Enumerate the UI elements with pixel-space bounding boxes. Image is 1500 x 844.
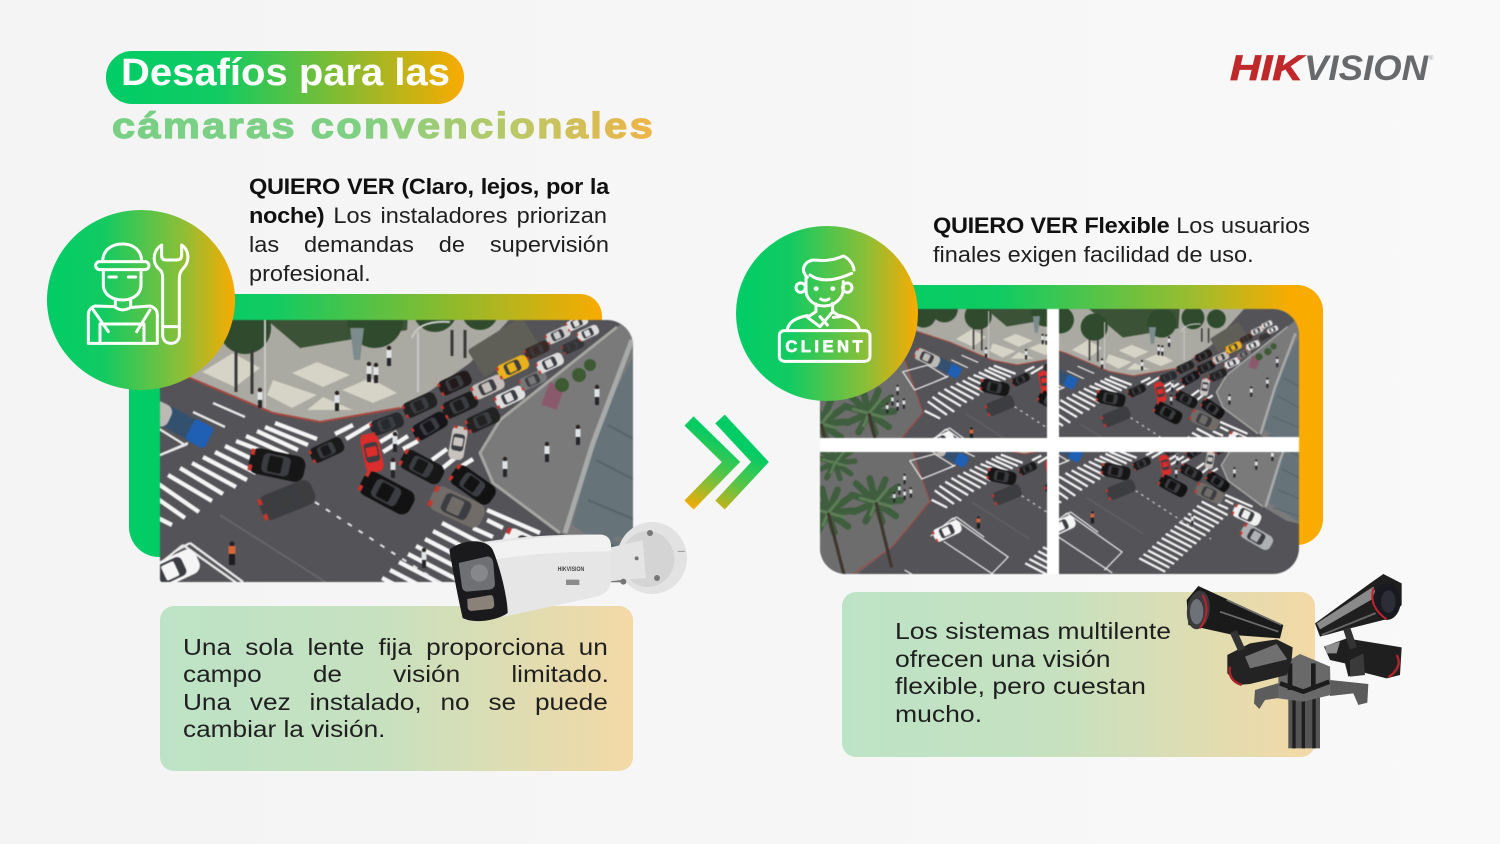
- photo: single wide-angle intersection: [159, 319, 634, 583]
- callout text: Una sola lente fija proporciona un: [183, 634, 608, 660]
- logo: Hikvision: [1230, 50, 1434, 86]
- icon: multi-camera pole: [1186, 574, 1402, 748]
- text block: quiero ver claro: las demandas de supervisión: [249, 232, 609, 257]
- callout text: Los sistemas multilente: [895, 618, 1171, 644]
- view: top left: [819, 308, 1048, 439]
- title: [106, 51, 655, 145]
- arrow: double chevron: [684, 414, 769, 510]
- text block: quiero ver claro: [249, 174, 610, 286]
- callout text: [895, 618, 1171, 726]
- logo: Hikvision: ®: [1429, 55, 1434, 62]
- text block: quiero ver claro: profesional.: [249, 261, 371, 286]
- text block: quiero ver claro: noche) Los instaladores priorizan: [249, 203, 607, 228]
- icon: installer badge: [47, 210, 235, 390]
- text block: quiero ver flexible: [933, 213, 1310, 267]
- panel: left gradient frame: [129, 294, 602, 557]
- view: top right: [1058, 308, 1300, 438]
- callout text: [183, 634, 609, 742]
- view: bottom left: [819, 451, 1048, 575]
- icon: client badge: [736, 226, 918, 401]
- panel: right gradient frame: [860, 285, 1323, 545]
- text block: quiero ver flexible: QUIERO VER Flexible Los usuarios: [933, 213, 1310, 238]
- icon: bullet camera: HIKVISION: [558, 566, 584, 573]
- view: bottom right: [1058, 451, 1300, 575]
- text block: quiero ver claro: QUIERO VER (Claro, lejos, por la: [249, 174, 609, 199]
- callout text: ofrecen una visión: [895, 646, 1111, 672]
- callout: left limitation: [160, 606, 633, 771]
- photo grid: four cropped views: [820, 309, 1299, 574]
- icon: client badge: CLIENT: [785, 337, 863, 356]
- title pill: Desafíos para las: Desafíos para las: [121, 52, 450, 94]
- title second line: cámaras convencionales: cámaras convencionales: [112, 105, 655, 145]
- callout text: campo de visión limitado.: [183, 661, 609, 687]
- callout: right multilens cost: [842, 592, 1315, 757]
- callout text: mucho.: [895, 700, 982, 726]
- callout text: Una vez instalado, no se puede: [183, 688, 608, 714]
- callout text: cambiar la visión.: [183, 716, 385, 742]
- title pill: Desafíos para las: [106, 51, 655, 145]
- icon: bullet camera: [449, 522, 687, 622]
- text block: quiero ver flexible: finales exigen facilidad de uso.: [933, 242, 1254, 267]
- callout text: flexible, pero cuestan: [895, 673, 1146, 699]
